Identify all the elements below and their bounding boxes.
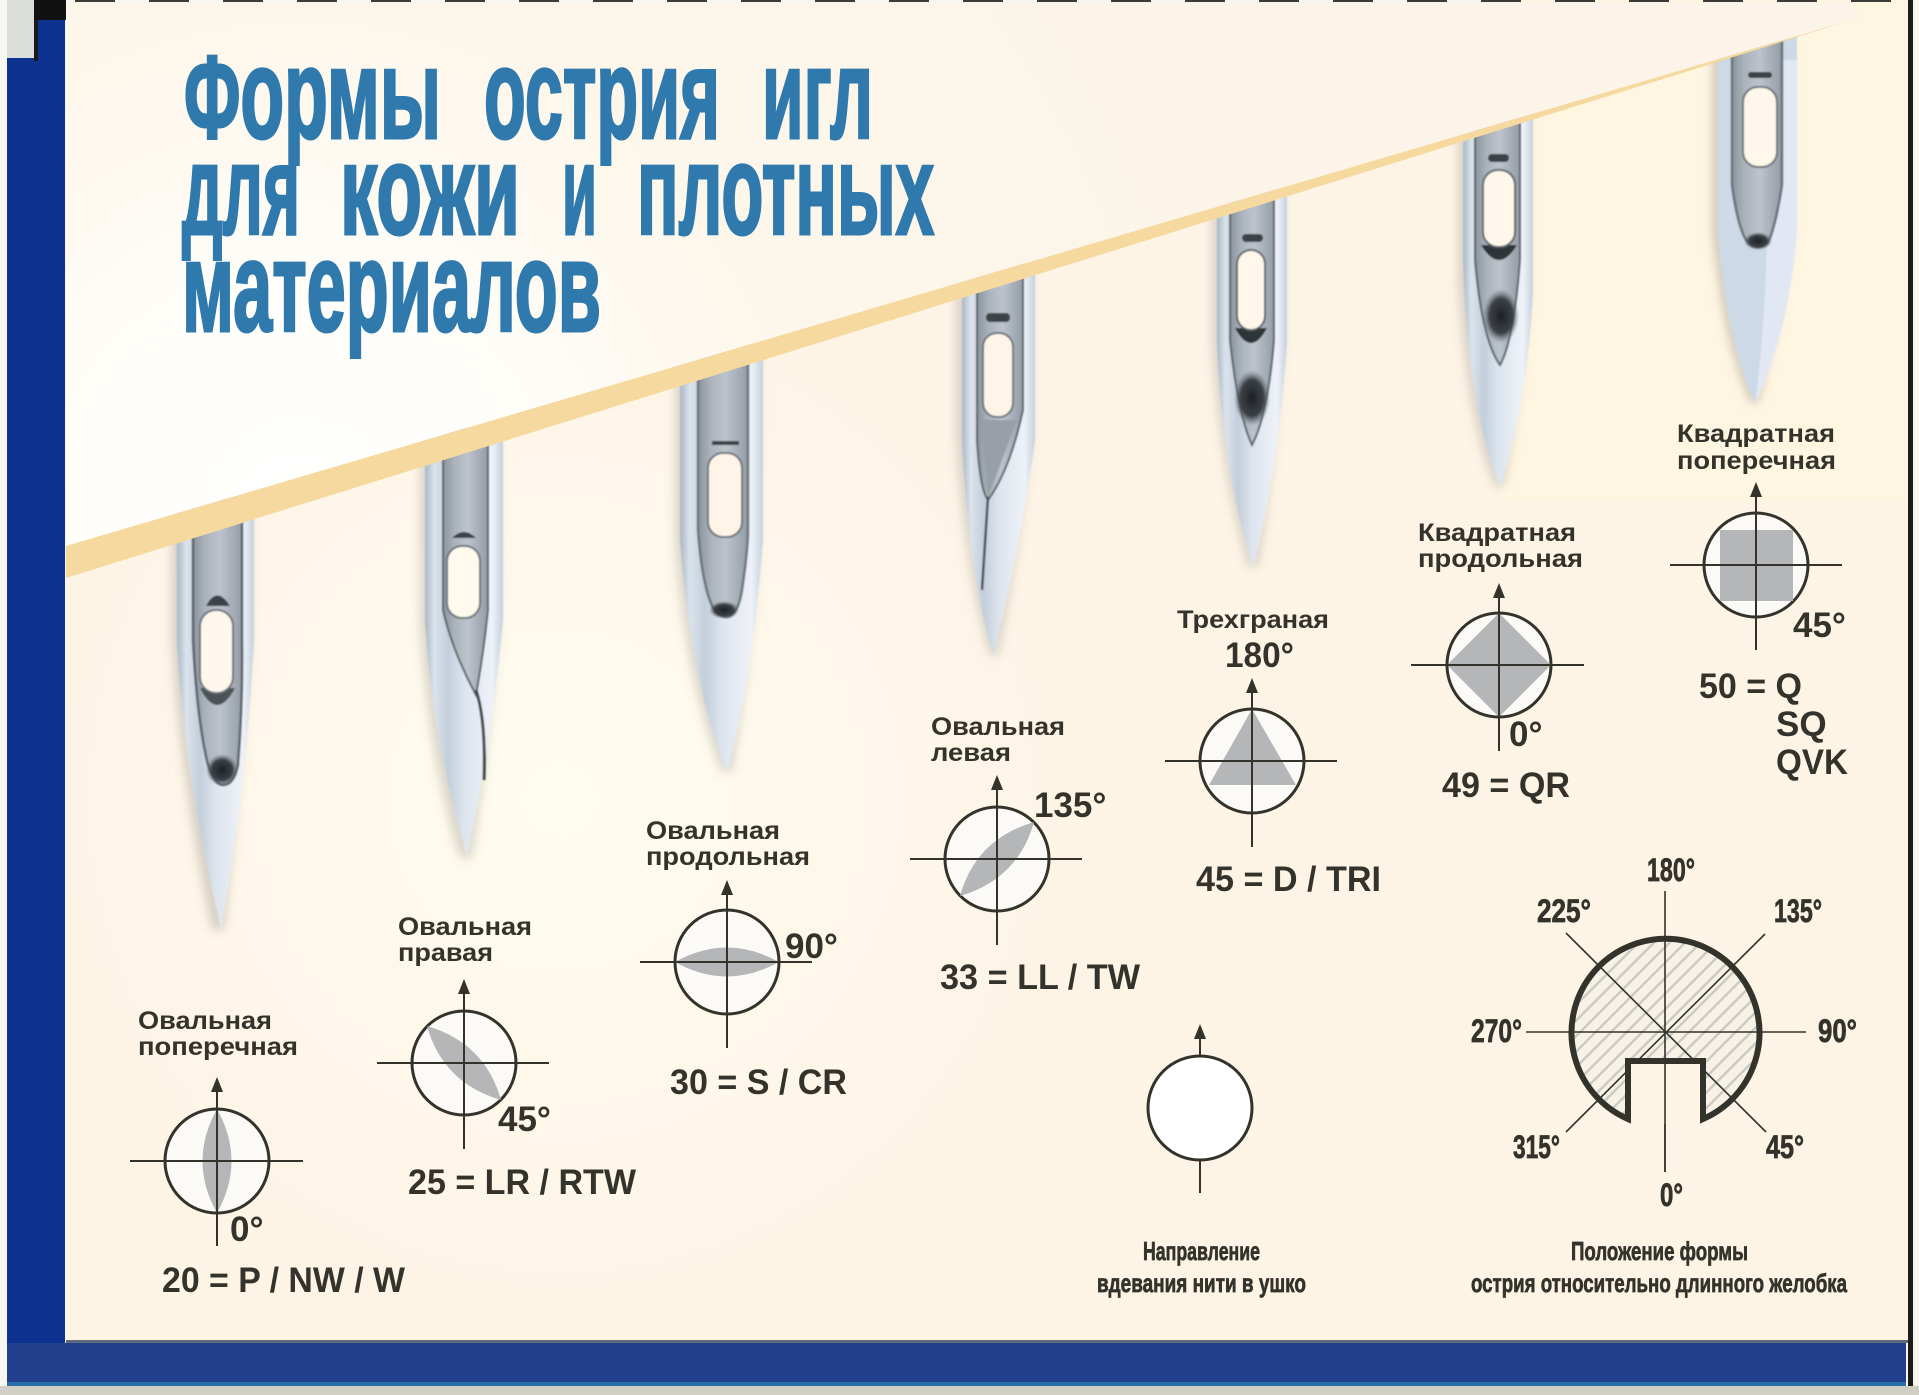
needle 7 xyxy=(1712,25,1797,403)
title xyxy=(182,23,934,359)
needle 4 xyxy=(956,260,1035,656)
diagram: point position relative to long groove: Положение формы xyxy=(1571,1236,1748,1266)
diagram: square transverse: QVK xyxy=(1776,743,1848,782)
diagram: oval transverse: поперечная xyxy=(138,1033,298,1061)
needle 5 xyxy=(1212,180,1287,567)
diagram: oval left: 135° xyxy=(1034,786,1106,825)
diagram: square longitudinal: продольная xyxy=(1418,545,1583,573)
needle 6 xyxy=(1458,105,1533,487)
needle 1 xyxy=(172,500,254,930)
diagram: oval right: 45° xyxy=(498,1100,551,1139)
diagram: oval transverse xyxy=(130,1007,405,1300)
title: для xyxy=(182,119,300,262)
diagram: point position relative to long groove: 90° xyxy=(1818,1013,1857,1049)
diagram: oval longitudinal xyxy=(640,817,847,1102)
diagram: square longitudinal: 49 = QR xyxy=(1442,766,1570,805)
diagram: point position relative to long groove: 0° xyxy=(1660,1177,1683,1213)
diagonal tan band xyxy=(66,18,1858,578)
diagram: point position relative to long groove xyxy=(1471,852,1857,1298)
title: Формы xyxy=(184,23,441,166)
diagram: point position relative to long groove: 45° xyxy=(1766,1129,1804,1165)
diagram: triangular xyxy=(1165,606,1381,899)
diagram: triangular: 180° xyxy=(1225,636,1294,675)
diagram: triangular: Трехграная xyxy=(1177,606,1329,634)
diagram: square transverse: поперечная xyxy=(1677,447,1836,475)
diagram: point position relative to long groove: 135° xyxy=(1774,893,1822,929)
diagram: oval right xyxy=(377,913,636,1202)
diagram: oval right: правая xyxy=(398,939,493,967)
title: кожи xyxy=(340,119,520,262)
diagram: point position relative to long groove: 180° xyxy=(1647,852,1695,888)
diagram: oval left: левая xyxy=(931,739,1011,767)
diagram: oval right: Овальная xyxy=(398,913,532,941)
diagram: point position relative to long groove: 225° xyxy=(1537,893,1591,929)
diagram: square transverse: 45° xyxy=(1793,606,1846,645)
title: плотных xyxy=(637,119,934,262)
diagram: oval right: 25 = LR / RTW xyxy=(408,1163,636,1202)
diagram: oval longitudinal: продольная xyxy=(646,843,810,871)
top edge dashes xyxy=(75,0,1905,2)
needle 2 xyxy=(420,430,503,858)
title: игл xyxy=(762,23,873,166)
diagram: triangular: 45 = D / TRI xyxy=(1196,860,1381,899)
diagram: square transverse: SQ xyxy=(1776,705,1827,744)
upper white wedge xyxy=(66,2,1858,546)
diagram: point position relative to long groove: 315° xyxy=(1513,1129,1560,1165)
needle 3 xyxy=(675,340,763,772)
title: материалов xyxy=(182,216,601,359)
diagram: square transverse: Квадратная xyxy=(1677,420,1835,448)
diagram: square transverse xyxy=(1670,420,1848,782)
diagram: square longitudinal: 0° xyxy=(1509,715,1542,754)
diagram: square transverse: 50 = Q xyxy=(1699,667,1802,706)
title: острия xyxy=(484,23,720,166)
diagram: oval left xyxy=(910,713,1140,997)
diagram: threading direction: вдевания нити в ушко xyxy=(1097,1268,1306,1298)
diagram: oval left: 33 = LL / TW xyxy=(940,958,1140,997)
title: и xyxy=(562,119,597,262)
diagram: oval transverse: Овальная xyxy=(138,1007,272,1035)
diagram: oval transverse: 0° xyxy=(230,1210,263,1249)
diagram: oval longitudinal: 30 = S / CR xyxy=(670,1063,847,1102)
diagram: point position relative to long groove: 270° xyxy=(1471,1013,1522,1049)
diagram: oval longitudinal: Овальная xyxy=(646,817,780,845)
diagram: threading direction: Направление xyxy=(1143,1236,1260,1266)
diagram: square longitudinal xyxy=(1411,519,1584,805)
diagram: threading direction xyxy=(1097,1024,1306,1298)
binding corner xyxy=(7,0,66,61)
diagram: oval longitudinal: 90° xyxy=(785,927,838,966)
diagram: oval left: Овальная xyxy=(931,713,1065,741)
diagram: oval transverse: 20 = P / NW / W xyxy=(162,1261,405,1300)
diagram: square longitudinal: Квадратная xyxy=(1418,519,1576,547)
